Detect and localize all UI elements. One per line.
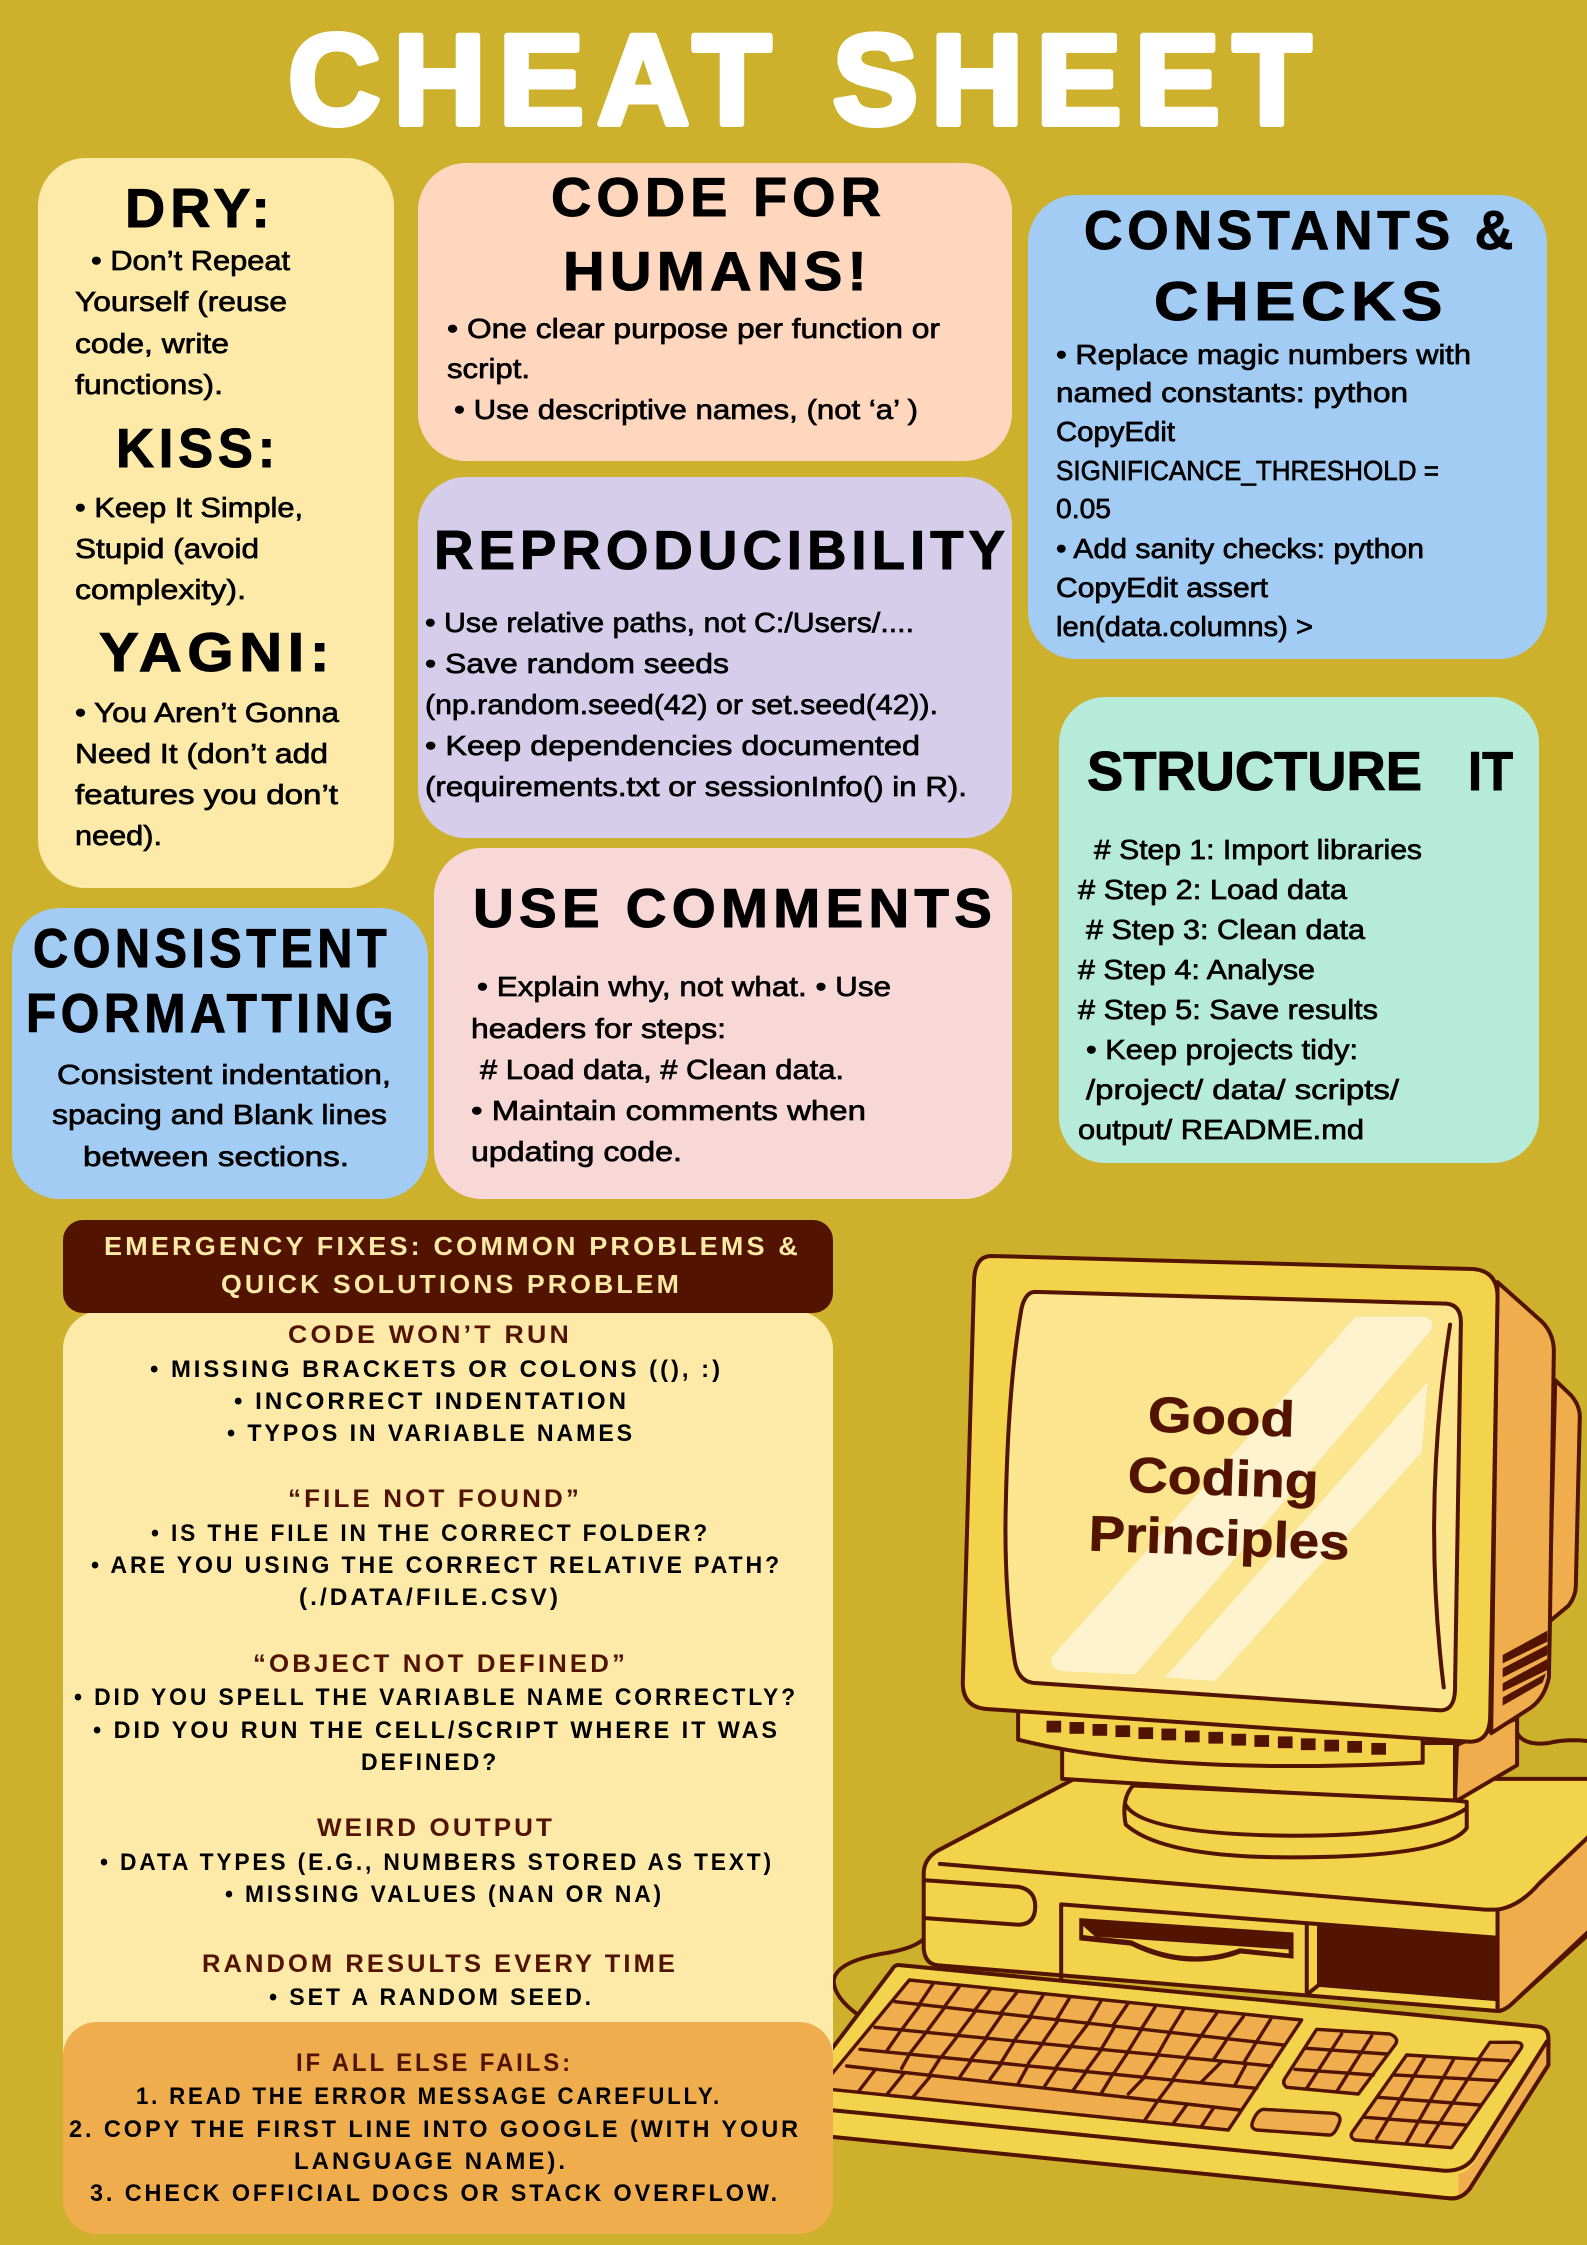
text: structure steps: • Keep projects tidy: [1086,1034,1358,1065]
panel: emergency fixes header [63,1220,833,1313]
monitor stand disc [1124,1785,1467,1857]
text: KISS description: complexity). [75,574,246,605]
heading: code for humans: HUMANS! [563,240,872,302]
panel: consistent formatting [12,908,428,1199]
text: use comments bullets: • Maintain comments when [471,1095,866,1126]
heading: structure it: IT [1468,740,1513,802]
monitor front bezel [963,1256,1498,1742]
panel background [418,163,1012,461]
screen curve highlight [1434,1325,1450,1687]
monitor back bump [1549,1380,1580,1622]
section: code won't run: • MISSING BRACKETS OR COLONS ((), :) [150,1356,723,1383]
heading: code for humans: CODE FOR [551,166,886,228]
text: structure steps: # Step 4: Analyse [1078,954,1315,985]
section: weird output: • MISSING VALUES (NAN OR NA) [225,1881,664,1908]
text: structure steps: # Step 1: Import libraries [1094,834,1422,865]
text: DRY description [75,245,290,400]
section: code won't run: CODE WON’T RUN [288,1321,572,1349]
panel background [1028,195,1547,659]
section: weird output: WEIRD OUTPUT [317,1814,555,1842]
section: object not defined [74,1650,798,1776]
screen text: Good Coding Principles: Good [1147,1386,1296,1448]
heading: consistent formatting [26,917,398,1044]
text: structure steps: # Step 5: Save results [1078,994,1378,1025]
text: constants and checks bullets: • Add sanity checks: python [1056,533,1424,564]
text: structure steps [1078,834,1422,1145]
header text: QUICK SOLUTIONS PROBLEM [221,1269,682,1299]
monitor side [1491,1282,1554,1733]
text: YAGNI description [75,697,339,851]
text: code for humans bullets [447,313,940,425]
heading: if all else fails: IF ALL ELSE FAILS: [296,2049,573,2077]
section: weird output [100,1814,774,1908]
title: CHEAT SHEET [288,9,1324,152]
system unit case [924,1779,1587,2011]
text: structure steps: # Step 2: Load data [1078,874,1347,905]
text: reproducibility bullets [425,607,967,802]
text: constants and checks bullets: CopyEdit [1056,416,1175,447]
text: structure steps: output/ README.md [1078,1114,1364,1145]
heading: DRY: DRY: [125,177,275,239]
cable: left [834,1939,924,2015]
header text [104,1231,801,1299]
heading: KISS: KISS: [116,417,280,479]
screen glare strips [1051,1317,1432,1681]
panel: emergency fixes body [63,1311,833,2121]
screen text: Good Coding Principles [1088,1385,1355,1571]
keyboard [813,1965,1548,2198]
text: constants and checks bullets: 0.05 [1056,493,1111,524]
panel: DRY KISS YAGNI [38,158,394,888]
monitor neck [1062,1718,1517,1803]
text: YAGNI description: need). [75,820,162,851]
text: YAGNI description: features you don’t [75,779,338,810]
main keys [820,1980,1302,2130]
text: constants and checks bullets: SIGNIFICANCE_THRESHOLD = [1056,455,1439,486]
header background [63,1220,833,1313]
text: constants and checks bullets: len(data.columns) > [1056,611,1313,642]
cable: right [1517,1733,1587,1744]
heading: code for humans [551,166,886,302]
text: constants and checks bullets: • Replace magic numbers with [1056,339,1471,370]
text: steps: LANGUAGE NAME). [294,2148,568,2175]
text: DRY description: functions). [75,369,223,400]
heading: constants and checks [1084,199,1518,332]
section: random results: • SET A RANDOM SEED. [269,1984,594,2011]
header text: EMERGENCY FIXES: COMMON PROBLEMS & [104,1231,801,1261]
panel background [38,158,394,888]
section: file not found: • IS THE FILE IN THE CORRECT FOLDER? [151,1520,710,1547]
text: DRY description: code, write [75,328,229,359]
heading: YAGNI: YAGNI: [99,621,335,683]
panel background [63,2022,833,2234]
panel: structure it [1059,697,1539,1163]
text: use comments bullets: • Explain why, not what. • Use [477,971,891,1002]
text: structure steps: # Step 3: Clean data [1086,914,1365,945]
panel: use comments [434,848,1012,1199]
section: object not defined: • DID YOU SPELL THE VARIABLE NAME CORRECTLY? [74,1684,798,1711]
section: code won't run: • TYPOS IN VARIABLE NAMES [227,1420,635,1447]
panel background [12,908,428,1199]
section: weird output: • DATA TYPES (E.G., NUMBERS STORED AS TEXT) [100,1849,774,1876]
screen text: Good Coding Principles: Coding [1127,1447,1320,1509]
panel background [63,1311,833,2121]
heading: reproducibility: REPRODUCIBILITY [434,519,1010,581]
panel background [434,848,1012,1199]
text: steps: 1. READ THE ERROR MESSAGE CAREFULLY. [136,2083,722,2110]
text: code for humans bullets: • Use descriptive names, (not ‘a’ ) [454,394,918,425]
panel background [418,477,1012,838]
monitor screen [1005,1292,1461,1710]
text: use comments bullets: # Load data, # Clean data. [480,1054,844,1085]
text: constants and checks bullets: CopyEdit assert [1056,572,1268,603]
text: YAGNI description: Need It (don’t add [75,738,328,769]
numeric keypad [1351,2042,1522,2148]
text: reproducibility bullets: (requirements.txt or sessionInfo() in R). [425,771,967,802]
section: object not defined: DEFINED? [361,1749,499,1776]
section: code won't run: • INCORRECT INDENTATION [234,1388,629,1415]
navigation keys [1284,2029,1397,2094]
monitor indicator dots [1046,1721,1386,1755]
heading: constants and checks: CONSTANTS & [1084,199,1518,261]
section: code won't run [150,1321,723,1447]
heading: consistent formatting: CONSISTENT [33,917,391,979]
heading: constants and checks: CHECKS [1154,270,1448,332]
text: consistent formatting description: Consistent indentation, [57,1059,391,1090]
text: KISS description [75,492,303,605]
text: use comments bullets: updating code. [471,1136,682,1167]
text: reproducibility bullets: (np.random.seed(42) or set.seed(42)). [425,689,938,720]
text: use comments bullets [471,971,891,1167]
section: file not found [91,1485,782,1611]
text: DRY description: Yourself (reuse [75,286,287,317]
text: KISS description: Stupid (avoid [75,533,259,564]
heading: structure it: STRUCTURE [1087,740,1422,802]
keyboard right side [1458,2045,1548,2197]
text: structure steps: /project/ data/ scripts/ [1086,1074,1399,1105]
keyboard front edge [813,2040,1548,2198]
text: reproducibility bullets: • Use relative paths, not C:/Users/.... [425,607,914,638]
text: reproducibility bullets: • Keep dependencies documented [425,730,920,761]
section: random results: RANDOM RESULTS EVERY TIME [202,1950,678,1978]
section: file not found: • ARE YOU USING THE CORRECT RELATIVE PATH? [91,1552,782,1579]
panel: constants and checks [1028,195,1547,659]
text: constants and checks bullets [1056,339,1471,642]
illustration: retro desktop computer [813,1256,1587,2198]
section: object not defined: • DID YOU RUN THE CELL/SCRIPT WHERE IT WAS [93,1717,780,1744]
section: object not defined: “OBJECT NOT DEFINED” [253,1650,628,1678]
text: reproducibility bullets: • Save random seeds [425,648,729,679]
heading: consistent formatting: FORMATTING [26,982,398,1044]
text: DRY description: • Don’t Repeat [91,245,290,276]
text: consistent formatting description: between sections. [83,1141,349,1172]
keyboard body [813,1965,1548,2198]
text: steps: 2. COPY THE FIRST LINE INTO GOOGLE (WITH YOUR [69,2116,801,2143]
heading: use comments: USE COMMENTS [473,877,997,939]
panel: code for humans [418,163,1012,461]
text: consistent formatting description [52,1059,391,1172]
section: random results [202,1950,678,2011]
screen text: Good Coding Principles: Principles [1088,1505,1351,1571]
panel background [1059,697,1539,1163]
text: use comments bullets: headers for steps: [471,1013,726,1044]
section: file not found: (./DATA/FILE.CSV) [299,1584,561,1611]
text: code for humans bullets: • One clear purpose per function or [447,313,940,344]
text: steps [69,2083,801,2207]
text: YAGNI description: • You Aren’t Gonna [75,697,339,728]
text: KISS description: • Keep It Simple, [75,492,303,523]
panel: reproducibility [418,477,1012,838]
long key [1252,2109,1340,2135]
panel: if all else fails [63,2022,833,2234]
monitor lower strip [1018,1710,1423,1766]
text: constants and checks bullets: named constants: python [1056,377,1408,408]
text: code for humans bullets: script. [447,353,530,384]
text: steps: 3. CHECK OFFICIAL DOCS OR STACK OVERFLOW. [90,2180,780,2207]
text: consistent formatting description: spacing and Blank lines [52,1099,387,1130]
monitor side vents [1503,1631,1547,1706]
section: file not found: “FILE NOT FOUND” [288,1485,582,1513]
